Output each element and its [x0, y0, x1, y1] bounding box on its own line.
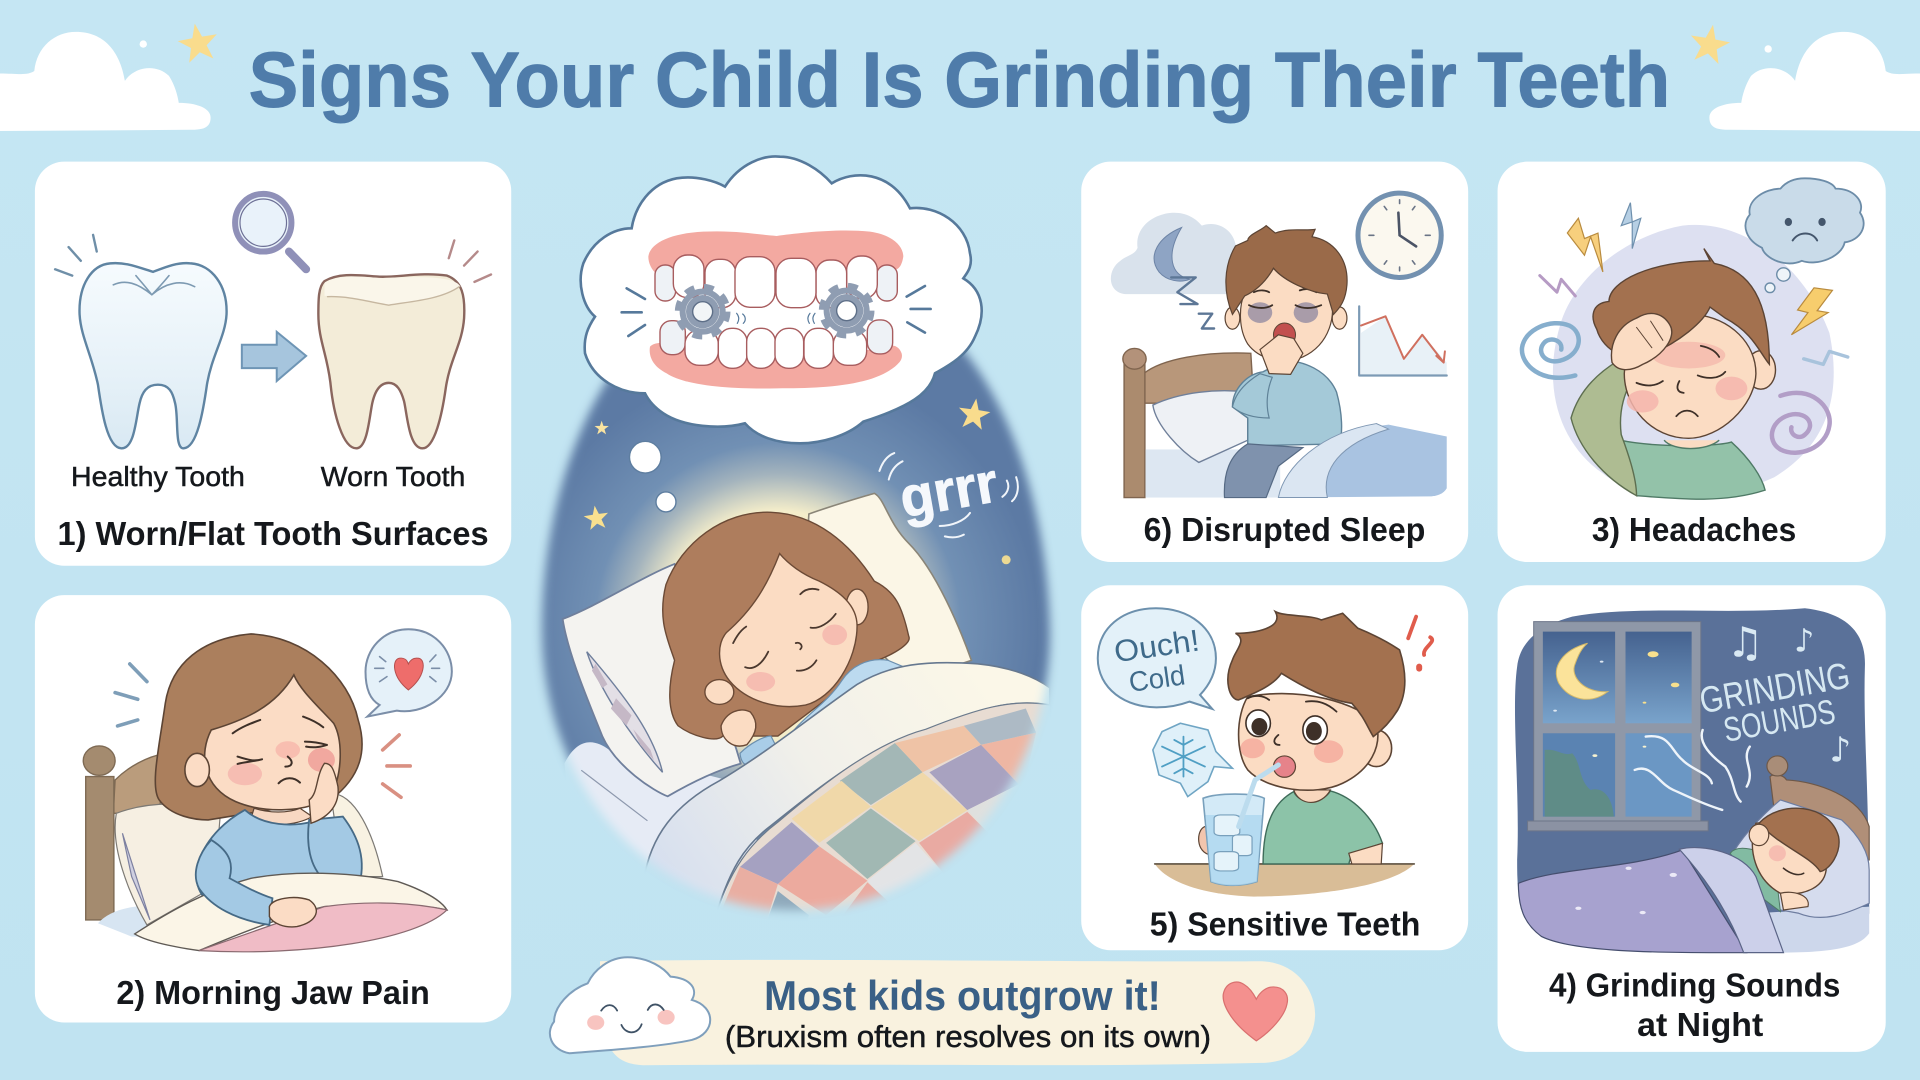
panel 6: disrupted sleep [1081, 162, 1468, 562]
torso [196, 810, 331, 913]
sound waves [1635, 730, 1750, 810]
panel 1 label: 1) Worn/Flat Tooth Surfaces [58, 516, 489, 553]
thought bubbles and stars [582, 441, 1018, 564]
face [720, 554, 857, 707]
spirals [1522, 323, 1579, 378]
hair [1228, 612, 1405, 737]
panel 2 label: 2) Morning Jaw Pain [116, 975, 430, 1012]
bubble text: Ouch! [1112, 624, 1202, 669]
lightning bolts [1567, 218, 1603, 272]
gears [678, 286, 871, 336]
panel 2: morning jaw pain [35, 595, 511, 1022]
face [1239, 694, 1378, 790]
center scene: sleeping child [536, 348, 1056, 915]
panel 4 label: 4) Grinding Sounds [1549, 968, 1840, 1005]
duvet fold [644, 663, 1050, 929]
bubble text: Cold [1127, 659, 1187, 698]
window [1528, 622, 1708, 831]
boy yawning illustration [1111, 193, 1447, 498]
boy with headache illustration [1522, 178, 1864, 499]
speech bubble heart [366, 629, 452, 717]
shirt [1263, 791, 1382, 864]
stars top [140, 20, 1772, 65]
table [1155, 864, 1414, 897]
tooth captions: Healthy Tooth [71, 461, 245, 492]
panel 6 label: 6) Disrupted Sleep [1144, 512, 1425, 549]
panel 4 label: at Night [1637, 1007, 1763, 1044]
blankets [135, 873, 447, 951]
panel 5: sensitive teeth [1081, 585, 1468, 950]
music notes: ♫ [1727, 617, 1764, 666]
speech bubble [1098, 608, 1216, 709]
banner background [600, 960, 1315, 1065]
bubble text [1112, 624, 1202, 698]
smiling cloud [550, 957, 710, 1053]
grrr text: grrr [895, 450, 1002, 529]
face [1624, 314, 1756, 438]
title: Signs Your Child Is Grinding Their Teeth [249, 36, 1670, 124]
shirt [1609, 437, 1765, 499]
storm cloud [1745, 178, 1864, 293]
pajama collar [793, 659, 903, 730]
chart [1359, 306, 1447, 375]
tooth illustration [55, 194, 491, 448]
bottom banner [550, 957, 1315, 1065]
boy [1232, 361, 1342, 446]
night bedroom illustration [1515, 608, 1869, 953]
upper gums [648, 231, 903, 274]
moon [1556, 643, 1608, 699]
ear [1746, 351, 1776, 389]
banner subtext: (Bruxism often resolves on its own) [725, 1020, 1211, 1054]
boy drinking illustration [1098, 608, 1432, 897]
panel 5 label: 5) Sensitive Teeth [1150, 907, 1420, 944]
cloud top right [1709, 32, 1920, 131]
hand and glass [1199, 827, 1217, 855]
panel 1: worn tooth surfaces [35, 162, 511, 566]
sleeping kid [1730, 848, 1780, 912]
ice bubble [1153, 723, 1232, 797]
teeth [655, 255, 897, 368]
girl illustration [83, 629, 452, 952]
patchwork quilt [722, 704, 1048, 917]
panel 3: headaches [1498, 162, 1886, 562]
grinding sounds text [1696, 655, 1853, 750]
hair [663, 512, 909, 739]
lower gums [650, 343, 902, 389]
front pillow [563, 564, 741, 796]
panel 4: grinding sounds at night [1498, 585, 1886, 1052]
hand [1611, 313, 1672, 370]
panel 3 label: 3) Headaches [1592, 512, 1796, 549]
exclamation marks [1408, 617, 1432, 669]
hair [1593, 249, 1769, 364]
panel 4 label [1549, 968, 1840, 1044]
heart [1223, 982, 1287, 1041]
music notes: ♪ [1794, 621, 1814, 659]
grinding sounds text: GRINDING [1696, 655, 1853, 721]
arm [1571, 361, 1637, 496]
banner heading: Most kids outgrow it! [764, 972, 1161, 1019]
cloud top left [0, 32, 211, 131]
bed [1770, 775, 1869, 860]
magnifier [235, 194, 306, 269]
music notes: ♪ [1829, 731, 1851, 771]
bed [1144, 353, 1254, 403]
clock [1358, 193, 1441, 277]
music notes [1727, 617, 1851, 771]
purple blanket [1518, 850, 1747, 953]
panel 1: worn tooth surfaces: Worn Tooth [321, 461, 465, 492]
sleeve and hand [196, 840, 272, 925]
grinding sounds text: SOUNDS [1721, 693, 1838, 750]
grrr motion marks [879, 453, 1018, 537]
arrow [242, 332, 306, 381]
neck and ear [1294, 790, 1330, 802]
thought cloud with grinding teeth [581, 156, 992, 443]
